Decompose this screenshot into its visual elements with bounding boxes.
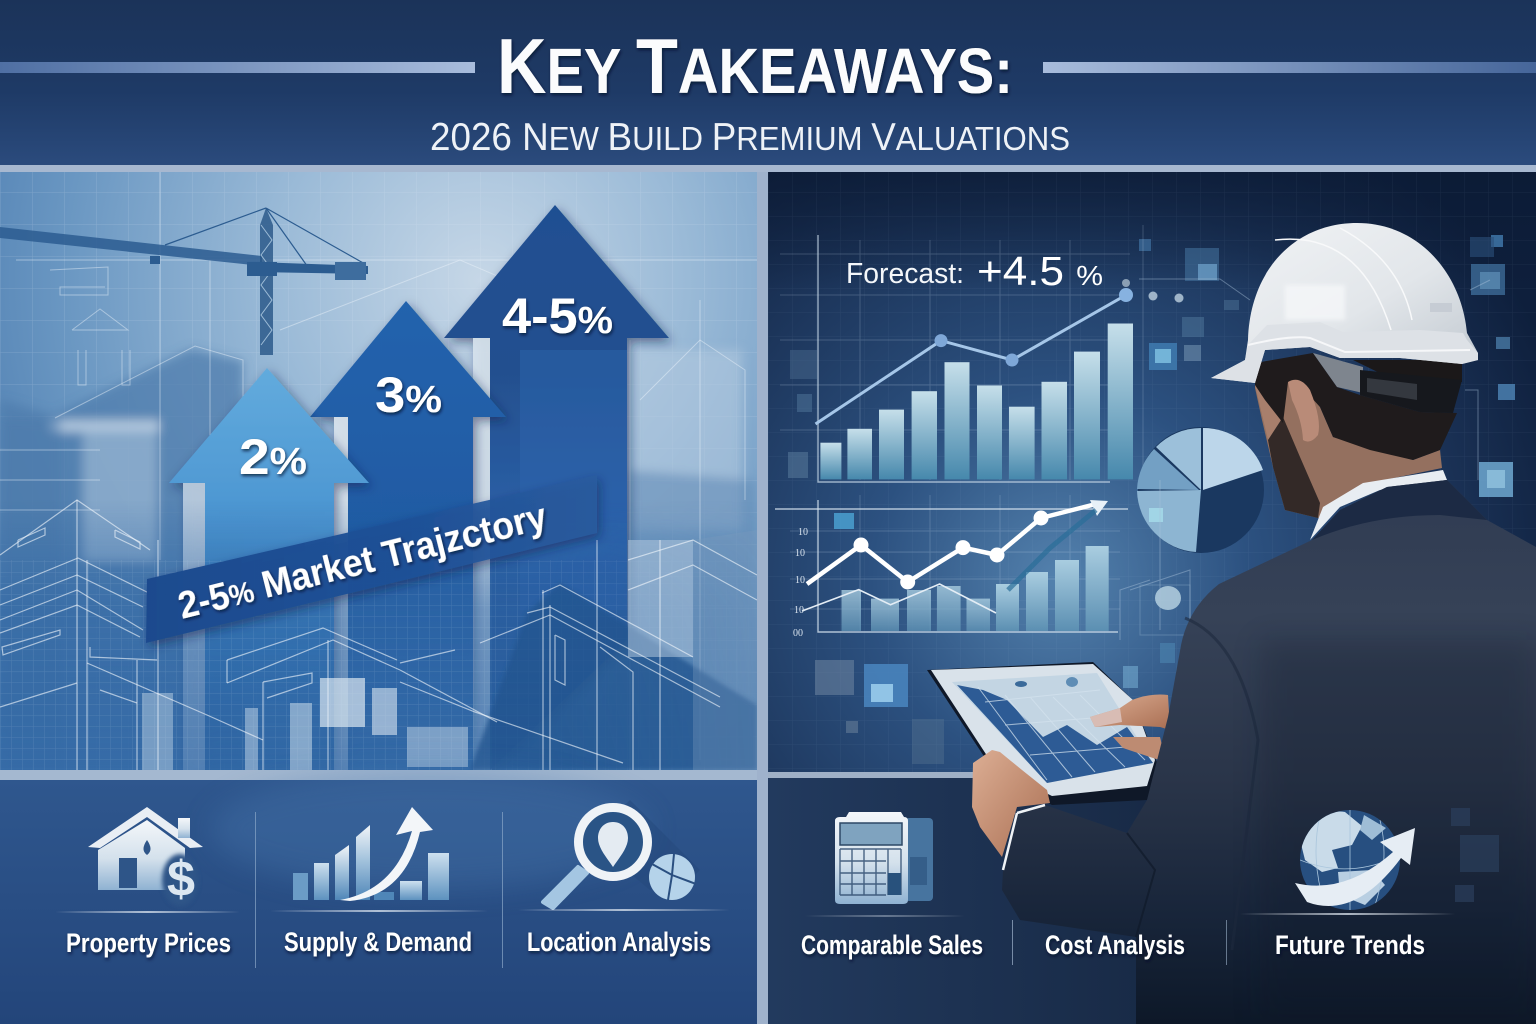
icon: house with price bbox=[88, 807, 203, 907]
icon: location magnifier bbox=[543, 800, 700, 908]
label: cost analysis: Cost Analysis bbox=[1045, 930, 1185, 960]
icon: house with price: $ bbox=[167, 851, 195, 907]
icon: globe with arrow bbox=[1295, 810, 1415, 910]
wireframe: upper blueprint lines bbox=[0, 172, 757, 770]
panel: lower left icon strip bbox=[0, 770, 768, 1024]
lower chart bars bbox=[842, 546, 1109, 631]
lower chart axis ticks: 10 bbox=[798, 527, 808, 538]
subtitle: 2026 NEW BUILD PREMIUM VALUATIONS bbox=[430, 116, 1070, 159]
pie chart bbox=[1137, 427, 1264, 553]
icon underline: future trends bbox=[1240, 913, 1455, 915]
arrow: 4-5% bbox=[444, 205, 669, 770]
icon: supply and demand chart bbox=[293, 807, 449, 901]
arrow: 2% bbox=[169, 368, 369, 770]
upper chart bars bbox=[820, 324, 1133, 479]
chart: lower bar and line chart bbox=[775, 495, 1128, 639]
crane bbox=[0, 208, 368, 355]
head and neck bbox=[1255, 353, 1462, 518]
helmet strap bbox=[1313, 353, 1462, 413]
icon underline: comparable sales bbox=[805, 915, 965, 917]
panel: lower right icon strip bbox=[768, 778, 1536, 1024]
lower chart axis ticks: 10 bbox=[795, 548, 805, 559]
label: comparable sales: Comparable Sales bbox=[801, 930, 983, 960]
divider one bbox=[255, 812, 256, 968]
tablet bbox=[927, 662, 1160, 805]
shirt collar bbox=[1310, 470, 1447, 540]
banner: market trajectory bbox=[146, 475, 597, 643]
pale block highlights bbox=[142, 678, 468, 770]
label: supply and demand: Supply & Demand bbox=[284, 927, 472, 957]
suit and sleeve bbox=[1002, 480, 1536, 1024]
background squares: future trends bbox=[1451, 808, 1499, 902]
analyst figure bbox=[927, 223, 1536, 1024]
icon underline: property prices bbox=[55, 911, 240, 913]
lower chart axis ticks: 10 bbox=[794, 605, 804, 616]
divider three bbox=[1012, 920, 1013, 965]
blurred buildings backdrop bbox=[0, 349, 757, 770]
lower blueprint shading bbox=[0, 500, 757, 770]
banner label: 2-5% Market Trajzctory bbox=[174, 496, 551, 628]
forecast value: +4.5 % bbox=[977, 248, 1103, 294]
divider four bbox=[1226, 920, 1227, 965]
percentage label 3%: 3% bbox=[375, 367, 442, 423]
icon underline: location analysis bbox=[518, 909, 730, 911]
lower chart axis ticks: 00 bbox=[793, 628, 803, 639]
label: location analysis: Location Analysis bbox=[527, 927, 711, 957]
panel: market trajectory bbox=[0, 172, 757, 770]
icon underline: supply and demand bbox=[270, 910, 488, 912]
upper chart trend line bbox=[816, 279, 1184, 424]
chart: upper bar and line chart bbox=[780, 225, 1184, 510]
label: future trends: Future Trends bbox=[1275, 930, 1425, 960]
header band bbox=[0, 0, 1536, 166]
title: KEY TAKEAWAYS: bbox=[497, 22, 1013, 110]
percentage label 2%: 2% bbox=[239, 429, 307, 485]
label: property prices: Property Prices bbox=[66, 928, 231, 958]
wireframe: lower buildings bbox=[0, 500, 757, 770]
hands bbox=[972, 695, 1170, 857]
forecast label: Forecast: bbox=[846, 258, 964, 290]
lower chart axis ticks bbox=[793, 527, 808, 639]
percentage label 4-5%: 4-5% bbox=[502, 288, 613, 344]
lower chart lines bbox=[802, 500, 1108, 613]
floating data squares bbox=[788, 235, 1515, 764]
icon: calculator bbox=[835, 812, 933, 904]
circuit outlines bbox=[1120, 279, 1490, 640]
lower chart axis ticks: 10 bbox=[795, 575, 805, 586]
hard hat bbox=[1211, 223, 1478, 383]
panel: forecast dashboard bbox=[768, 172, 1536, 772]
divider two bbox=[502, 812, 503, 968]
arrow: 3% bbox=[310, 301, 506, 770]
